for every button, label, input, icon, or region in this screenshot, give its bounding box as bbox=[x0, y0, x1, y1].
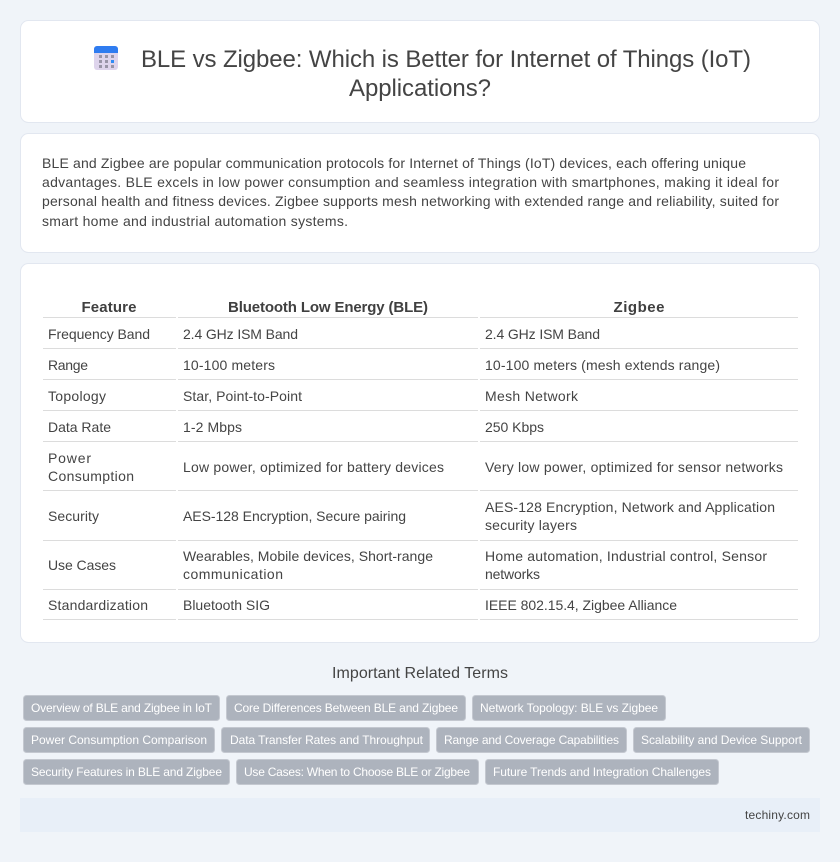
tag: Data Transfer Rates and Throughput bbox=[230, 733, 424, 747]
row: power consumption: Low power, optimized for battery devices bbox=[183, 459, 444, 475]
row: security: security layers bbox=[485, 517, 577, 533]
row: use cases bbox=[48, 548, 767, 582]
tag bbox=[486, 760, 718, 784]
heading: related terms: Important Related Terms bbox=[332, 665, 508, 682]
table header: Feature bbox=[82, 299, 136, 316]
row: topology: Star, Point-to-Point bbox=[183, 388, 302, 404]
table header: Zigbee bbox=[614, 299, 664, 316]
tag: Range and Coverage Capabilities bbox=[444, 733, 619, 747]
panel: comparison table bbox=[20, 264, 820, 642]
related term tags bbox=[24, 696, 810, 784]
row: security: AES-128 Encryption, Network and Application bbox=[485, 499, 775, 515]
tag bbox=[472, 696, 666, 720]
title: BLE vs Zigbee: Which is Better for Internet of Things (IoT) bbox=[141, 46, 751, 73]
tag: Use Cases: When to Choose BLE or Zigbee bbox=[244, 765, 470, 779]
tag bbox=[24, 696, 220, 720]
row: range bbox=[48, 357, 720, 373]
row: use cases: Use Cases bbox=[48, 557, 116, 573]
row: topology: Mesh Network bbox=[485, 388, 579, 404]
title bbox=[141, 46, 751, 102]
row: standardization: IEEE 802.15.4, Zigbee Alliance bbox=[485, 597, 677, 613]
panel: introduction: advantages. BLE excels in low power consumption and seamless integration with smartphones, making it ideal for bbox=[42, 174, 779, 190]
row: security: Security bbox=[48, 508, 99, 524]
panel: introduction bbox=[20, 134, 820, 252]
row: power consumption: Very low power, optimized for sensor networks bbox=[485, 459, 783, 475]
row: power consumption: Power bbox=[48, 450, 91, 466]
tag bbox=[226, 696, 466, 720]
tag: Security Features in BLE and Zigbee bbox=[31, 765, 222, 779]
row: data rate: 250 Kbps bbox=[485, 419, 544, 435]
tag bbox=[24, 760, 230, 784]
row: power consumption: Consumption bbox=[48, 468, 134, 484]
tag bbox=[634, 728, 810, 752]
tag bbox=[24, 728, 214, 752]
row: data rate: 1-2 Mbps bbox=[183, 419, 242, 435]
row: topology: Topology bbox=[48, 388, 106, 404]
row: frequency band: Frequency Band bbox=[48, 326, 150, 342]
footer bbox=[20, 798, 820, 832]
row: use cases: communication bbox=[183, 566, 283, 582]
row: data rate: Data Rate bbox=[48, 419, 111, 435]
icon: calendar bbox=[94, 46, 118, 70]
panel: introduction: personal health and fitness devices. Zigbee supports mesh networking with extended range and reliability, suited for bbox=[42, 193, 779, 209]
row: power consumption bbox=[48, 450, 783, 484]
row: topology bbox=[48, 388, 579, 404]
tag bbox=[436, 728, 626, 752]
row: frequency band bbox=[48, 326, 600, 342]
row: range: Range bbox=[48, 357, 88, 373]
tag: Core Differences Between BLE and Zigbee bbox=[234, 701, 458, 715]
panel: introduction: smart home and industrial automation systems. bbox=[42, 213, 348, 229]
table header bbox=[82, 299, 664, 316]
table header: Bluetooth Low Energy (BLE) bbox=[228, 299, 428, 316]
title: Applications? bbox=[349, 75, 491, 102]
header card bbox=[20, 20, 820, 122]
row: standardization: Standardization bbox=[48, 597, 148, 613]
panel: introduction: BLE and Zigbee are popular communication protocols for Internet of Things (IoT) devices, each offering unique bbox=[42, 155, 746, 171]
footer: techiny.com bbox=[745, 808, 810, 822]
row: range: 10-100 meters bbox=[183, 357, 275, 373]
tag: Overview of BLE and Zigbee in IoT bbox=[31, 701, 213, 715]
row: use cases: Wearables, Mobile devices, Short-range bbox=[183, 548, 433, 564]
tag: Power Consumption Comparison bbox=[31, 733, 207, 747]
row: data rate bbox=[48, 419, 544, 435]
tag bbox=[236, 760, 478, 784]
row: use cases: networks bbox=[485, 566, 540, 582]
row: frequency band: 2.4 GHz ISM Band bbox=[183, 326, 298, 342]
tag: Scalability and Device Support bbox=[641, 733, 803, 747]
row: security: AES-128 Encryption, Secure pairing bbox=[183, 508, 406, 524]
tag bbox=[222, 728, 430, 752]
row: standardization: Bluetooth SIG bbox=[183, 597, 270, 613]
row: standardization bbox=[48, 597, 677, 613]
tag: Future Trends and Integration Challenges bbox=[493, 765, 711, 779]
row: frequency band: 2.4 GHz ISM Band bbox=[485, 326, 600, 342]
row: range: 10-100 meters (mesh extends range) bbox=[485, 357, 720, 373]
row: security bbox=[48, 499, 775, 533]
tag: Network Topology: BLE vs Zigbee bbox=[480, 701, 658, 715]
row: use cases: Home automation, Industrial control, Sensor bbox=[485, 548, 767, 564]
